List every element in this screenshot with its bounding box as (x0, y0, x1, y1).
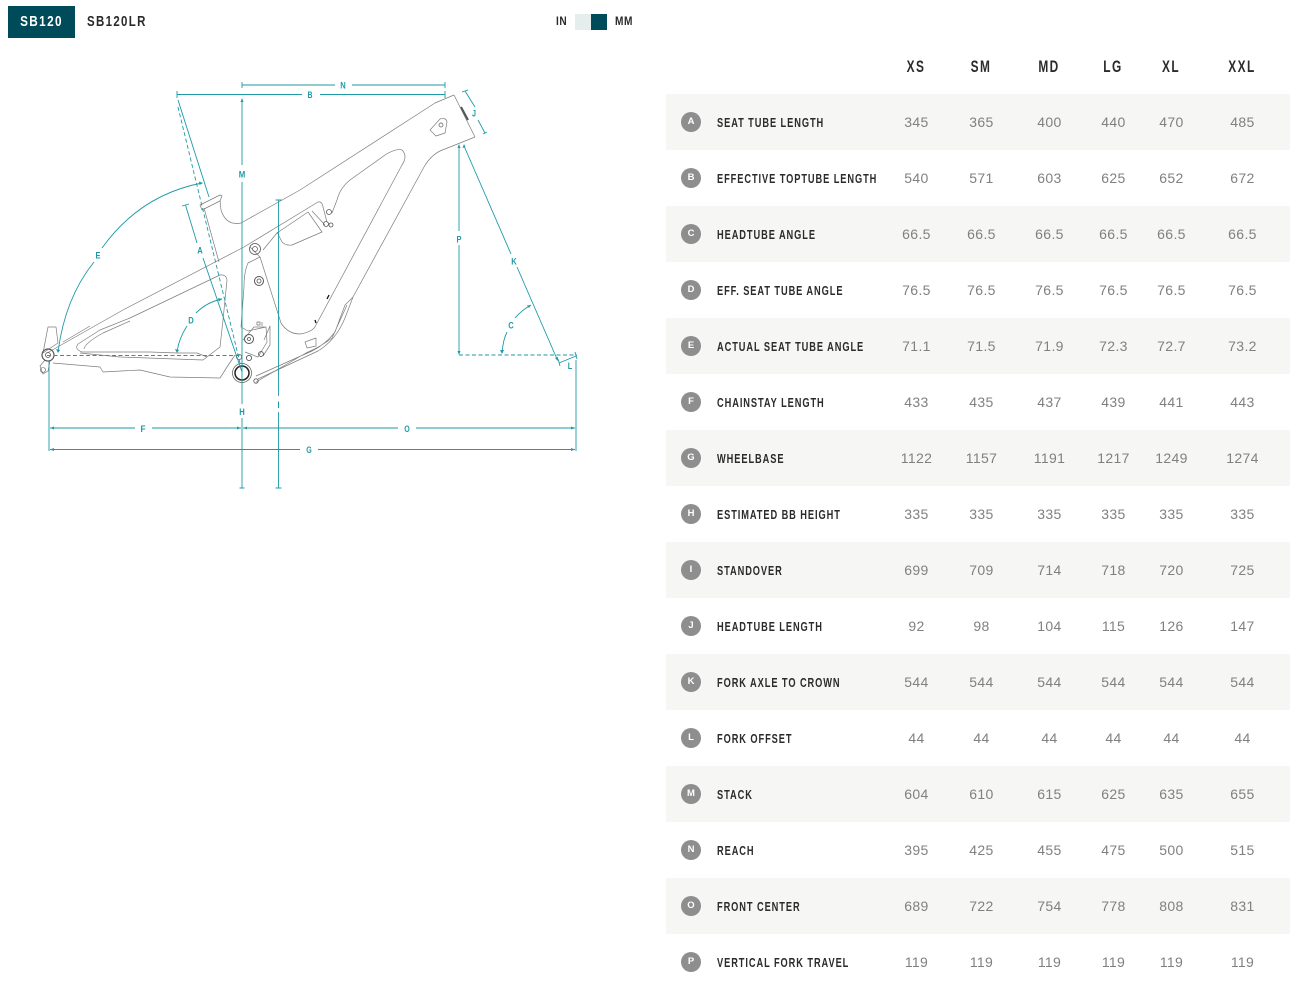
row E: E (688, 340, 694, 351)
row G: G (687, 452, 695, 463)
row O: O (687, 900, 695, 911)
row A: 365 (969, 114, 994, 130)
dimension letters: L (568, 361, 572, 372)
row F: 437 (1037, 394, 1062, 410)
row J: J (688, 620, 694, 631)
row A: A (688, 116, 694, 127)
row H: 335 (969, 506, 994, 522)
row O: 722 (969, 898, 994, 914)
row K: 544 (1159, 674, 1184, 690)
row F: 435 (969, 394, 994, 410)
unit toggle: IN / MM: MM (615, 16, 633, 28)
dimension K (464, 146, 557, 359)
dimension letters: C (508, 320, 514, 332)
row D: 76.5 (1099, 282, 1128, 298)
row E: 71.1 (902, 338, 931, 354)
row G: 1249 (1155, 450, 1188, 466)
row J: 147 (1230, 618, 1255, 634)
row L: FORK OFFSET (717, 732, 792, 746)
row I: 714 (1037, 562, 1062, 578)
dimension letters (96, 80, 572, 456)
row A (666, 94, 1290, 150)
row F: CHAINSTAY LENGTH (717, 396, 825, 410)
row I: 709 (969, 562, 994, 578)
row D: 76.5 (1228, 282, 1257, 298)
dimension letters: G (306, 445, 312, 456)
row B: 571 (969, 170, 994, 186)
dimension D arc (177, 299, 222, 352)
row G: 1122 (901, 450, 932, 466)
dimension letters: I (278, 400, 280, 411)
dimension L (558, 352, 577, 366)
row C: 66.5 (967, 226, 996, 242)
row C: 66.5 (1035, 226, 1064, 242)
row K: 544 (904, 674, 929, 690)
row O: FRONT CENTER (717, 900, 801, 914)
row H (681, 504, 1255, 524)
row P: 119 (1038, 954, 1061, 970)
row H: 335 (1159, 506, 1184, 522)
tab: SB120 active (8, 6, 75, 38)
row D: D (688, 284, 694, 295)
dimension A (182, 204, 242, 372)
row J: 104 (1037, 618, 1062, 634)
row O: 689 (904, 898, 929, 914)
row D: 76.5 (1035, 282, 1064, 298)
row A: 345 (904, 114, 929, 130)
row M: STACK (717, 788, 753, 802)
row F (681, 392, 1255, 412)
row M: 604 (904, 786, 929, 802)
row H: 335 (1101, 506, 1126, 522)
row K: 544 (969, 674, 994, 690)
arrowheads (50, 98, 575, 451)
row N: REACH (717, 844, 755, 858)
row M: M (687, 788, 695, 799)
row E: 71.5 (967, 338, 996, 354)
row I: 720 (1159, 562, 1184, 578)
row B: 603 (1037, 170, 1062, 186)
row N: 500 (1159, 842, 1184, 858)
tab: SB120LR: SB120LR (87, 14, 147, 30)
row J: 115 (1102, 618, 1125, 634)
row I: 699 (904, 562, 929, 578)
tab: SB120 active: SB120 (20, 14, 63, 30)
size headers: LG (1103, 58, 1123, 76)
row M: 615 (1037, 786, 1062, 802)
row N: 455 (1037, 842, 1062, 858)
row K (666, 654, 1290, 710)
dimension letters: N (340, 80, 346, 92)
row E: ACTUAL SEAT TUBE ANGLE (717, 340, 864, 354)
dimension letters: A (197, 246, 203, 256)
dimension letters: K (511, 256, 517, 268)
row M: 610 (969, 786, 994, 802)
row C: C (688, 228, 694, 239)
row P: 119 (1231, 954, 1254, 970)
row L: 44 (1105, 730, 1122, 746)
row P: VERTICAL FORK TRAVEL (717, 956, 849, 970)
row G: 1157 (966, 450, 997, 466)
row F: 443 (1230, 394, 1255, 410)
pivots and bottom bracket (40, 107, 468, 383)
row E: 72.3 (1099, 338, 1128, 354)
dimension letters: B (308, 90, 313, 101)
row L: 44 (1041, 730, 1058, 746)
row A: SEAT TUBE LENGTH (717, 116, 824, 130)
row H: 335 (1037, 506, 1062, 522)
row G: 1274 (1226, 450, 1259, 466)
row K: K (688, 676, 694, 687)
frame outline (40, 95, 475, 382)
row D: 76.5 (967, 282, 996, 298)
row M (666, 766, 1290, 822)
row F: 439 (1101, 394, 1126, 410)
row M: 635 (1159, 786, 1184, 802)
row C: 66.5 (1157, 226, 1186, 242)
seat tube extension (178, 100, 209, 197)
row L: 44 (908, 730, 925, 746)
dimension letters: H (239, 407, 245, 418)
row M: 655 (1230, 786, 1255, 802)
size headers (906, 58, 1256, 76)
row E: 71.9 (1035, 338, 1064, 354)
size headers: XXL (1228, 58, 1256, 76)
row N: 425 (969, 842, 994, 858)
size headers: XS (907, 58, 925, 76)
row I (666, 542, 1290, 598)
row N (681, 840, 1255, 860)
row P: 119 (1160, 954, 1183, 970)
row O: 778 (1101, 898, 1126, 914)
row P: P (688, 956, 694, 967)
row H: 335 (1230, 506, 1255, 522)
row J: 126 (1159, 618, 1184, 634)
row C: 66.5 (1099, 226, 1128, 242)
dimension J (462, 90, 487, 134)
row I: STANDOVER (717, 564, 783, 578)
row P: 119 (905, 954, 928, 970)
row C: 66.5 (1228, 226, 1257, 242)
row E: 73.2 (1228, 338, 1257, 354)
row A: 470 (1159, 114, 1184, 130)
unit toggle: IN / MM (556, 14, 633, 30)
row F: 441 (1159, 394, 1184, 410)
dimension lines (47, 82, 577, 488)
size headers: MD (1038, 58, 1060, 76)
row O: 831 (1230, 898, 1255, 914)
size headers: XL (1162, 58, 1180, 76)
row P: 119 (1102, 954, 1125, 970)
row G: 1191 (1034, 450, 1065, 466)
horizontal wheel axle lines (47, 354, 577, 356)
row D: 76.5 (1157, 282, 1186, 298)
row L: L (688, 732, 694, 743)
dimension letters: J (472, 108, 476, 120)
row I: 725 (1230, 562, 1255, 578)
row N: 395 (904, 842, 929, 858)
row A: 440 (1101, 114, 1126, 130)
dimension M and H (240, 100, 244, 488)
row B: 540 (904, 170, 929, 186)
row L: 44 (1234, 730, 1251, 746)
row H: ESTIMATED BB HEIGHT (717, 508, 841, 522)
row H: 335 (904, 506, 929, 522)
row K: 544 (1037, 674, 1062, 690)
row J: 98 (973, 618, 990, 634)
dimension letters: F (140, 424, 146, 435)
row K: FORK AXLE TO CROWN (717, 676, 841, 690)
row P: 119 (970, 954, 993, 970)
size headers: SM (971, 58, 991, 76)
row D (681, 280, 1257, 300)
row C: 66.5 (902, 226, 931, 242)
row F: 433 (904, 394, 929, 410)
row O: 754 (1037, 898, 1062, 914)
row P (681, 952, 1254, 972)
row J: HEADTUBE LENGTH (717, 620, 823, 634)
row H: H (688, 508, 694, 519)
row G: 1217 (1097, 450, 1130, 466)
row F: F (688, 396, 694, 407)
dimension C arc (502, 305, 531, 353)
row L: 44 (1163, 730, 1180, 746)
row K: 544 (1101, 674, 1126, 690)
row E (666, 318, 1290, 374)
row N: N (688, 844, 694, 855)
dimension N (242, 82, 445, 88)
dimension P (458, 146, 460, 353)
row K: 544 (1230, 674, 1255, 690)
dimension E arc (58, 183, 202, 352)
dimension letters: D (188, 316, 194, 326)
row B: 652 (1159, 170, 1184, 186)
row B (681, 168, 1255, 188)
row L: 44 (973, 730, 990, 746)
row E: 72.7 (1157, 338, 1186, 354)
row A: 400 (1037, 114, 1062, 130)
row M: 625 (1101, 786, 1126, 802)
dimension letters: P (456, 234, 462, 246)
row D: EFF. SEAT TUBE ANGLE (717, 284, 843, 298)
row J: 92 (908, 618, 925, 634)
row C: HEADTUBE ANGLE (717, 228, 816, 242)
row N: 475 (1101, 842, 1126, 858)
row B: EFFECTIVE TOPTUBE LENGTH (717, 172, 877, 186)
row B: 625 (1101, 170, 1126, 186)
row J (681, 616, 1255, 636)
row B: B (688, 172, 694, 183)
bike frame geometry diagram (40, 80, 578, 488)
row G (666, 430, 1290, 486)
row L (681, 728, 1251, 748)
dimension I (276, 200, 282, 488)
dimension B (177, 91, 445, 98)
row I: I (690, 564, 692, 575)
dimension letters: O (404, 424, 410, 435)
row O: 808 (1159, 898, 1184, 914)
row N: 515 (1230, 842, 1255, 858)
row A: 485 (1230, 114, 1255, 130)
dimension letters: M (239, 170, 245, 180)
unit toggle: IN / MM: IN (556, 16, 567, 28)
dimension letters: E (96, 250, 100, 262)
row I: 718 (1101, 562, 1126, 578)
row D: 76.5 (902, 282, 931, 298)
row B: 672 (1230, 170, 1255, 186)
dimension F O G (49, 360, 576, 451)
row C (666, 206, 1290, 262)
row O (666, 878, 1290, 934)
row G: WHEELBASE (717, 452, 784, 466)
